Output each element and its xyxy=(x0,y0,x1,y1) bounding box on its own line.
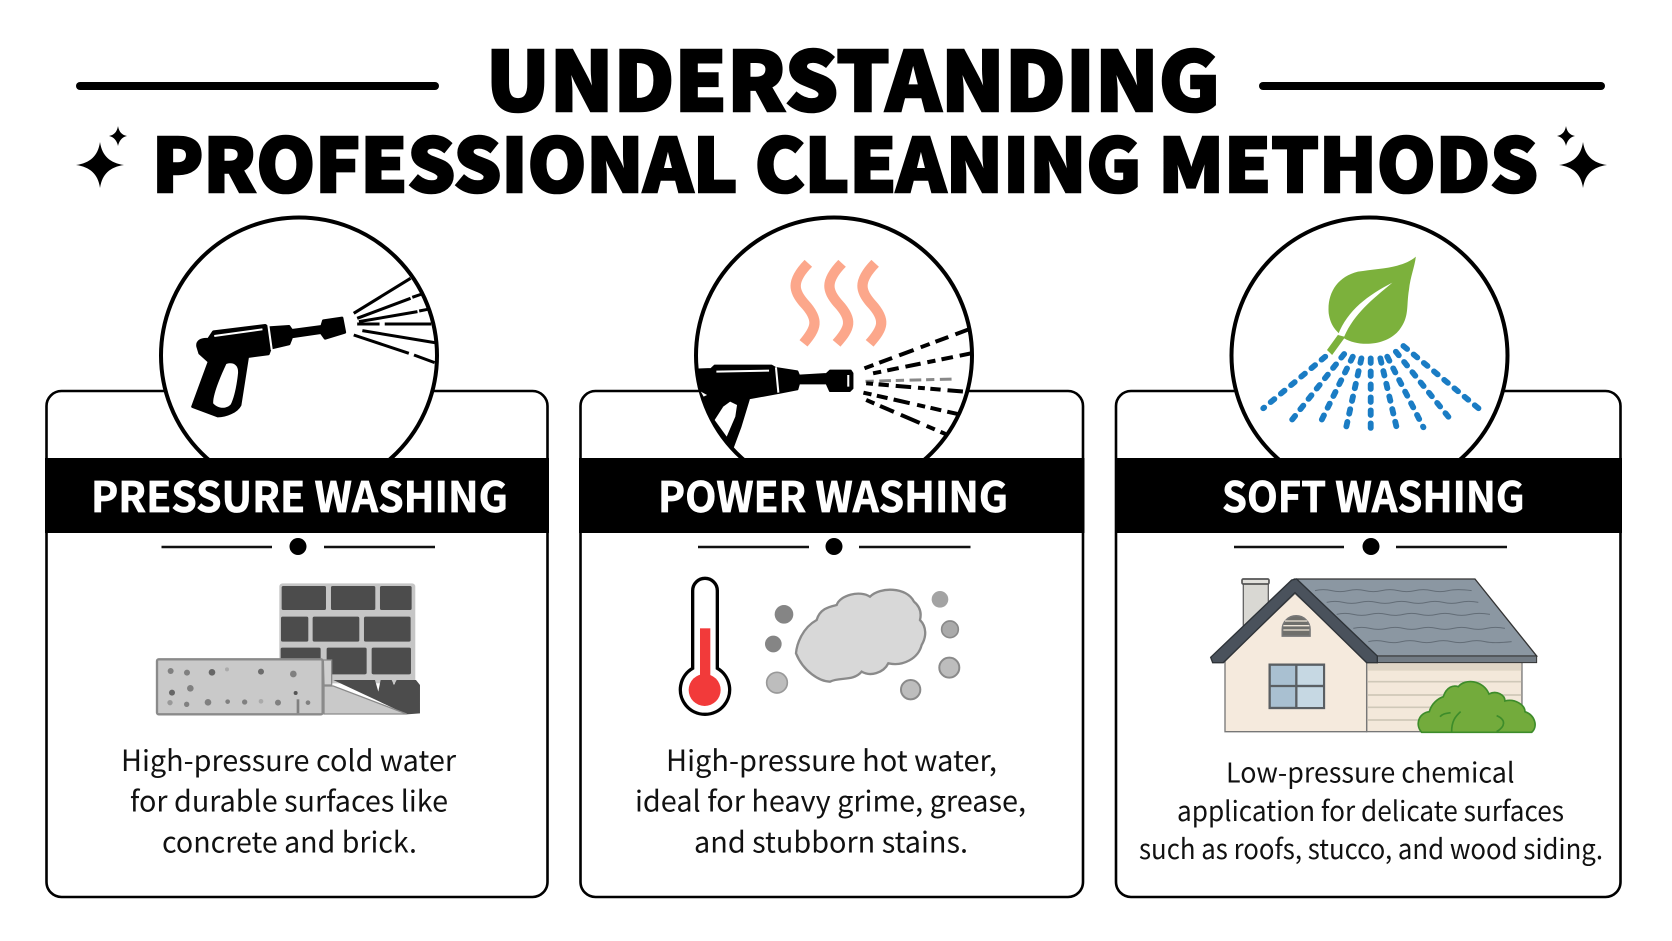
panel: power washing xyxy=(579,218,1084,897)
description text: and stubborn stains. xyxy=(694,820,968,862)
title line 1: UNDERSTANDING xyxy=(486,16,1220,135)
icon: water droplets xyxy=(1263,346,1479,432)
icon circle: hot water gun and steam xyxy=(694,216,974,458)
panel: soft washing xyxy=(1115,218,1622,897)
illustration: brick wall and concrete xyxy=(157,583,420,714)
description text: ideal for heavy grime, grease, xyxy=(635,778,1026,820)
description text: such as roofs, stucco, and wood siding. xyxy=(1139,827,1603,867)
description text: High-pressure hot water, xyxy=(666,738,997,780)
icon circle: pressure washer gun xyxy=(161,218,437,494)
title band xyxy=(45,458,549,533)
illustration: thermometer xyxy=(680,578,730,714)
description text: application for delicate surfaces xyxy=(1177,789,1564,829)
divider xyxy=(698,538,970,555)
title band xyxy=(1115,458,1622,533)
description text xyxy=(1139,750,1603,867)
description text: High-pressure cold water xyxy=(121,738,457,780)
icon: sparkles right xyxy=(1557,126,1607,188)
icon: sparkles left xyxy=(76,126,127,188)
header: title block xyxy=(76,16,1607,214)
title line 2: PROFESSIONAL CLEANING METHODS xyxy=(152,107,1538,214)
divider xyxy=(162,538,435,555)
icon: steam waves xyxy=(796,263,881,343)
description text xyxy=(121,738,457,862)
icon: dashed spray xyxy=(863,329,971,434)
illustration: house xyxy=(1211,579,1537,732)
icon: leaf xyxy=(1327,257,1416,355)
description text: concrete and brick. xyxy=(162,820,417,862)
title band: SOFT WASHING xyxy=(1222,464,1524,525)
illustration: grime cloud and particles xyxy=(765,590,959,699)
divider xyxy=(1234,538,1507,555)
description text: Low-pressure chemical xyxy=(1226,750,1514,790)
description text xyxy=(635,738,1026,862)
title band: PRESSURE WASHING xyxy=(91,464,508,525)
icon: spray gun xyxy=(687,366,852,450)
title band: POWER WASHING xyxy=(658,464,1008,525)
icon circle: leaf and soft spray xyxy=(1232,218,1508,494)
panel: pressure washing xyxy=(45,218,549,897)
title band xyxy=(579,458,1084,533)
description text: for durable surfaces like xyxy=(130,778,448,820)
